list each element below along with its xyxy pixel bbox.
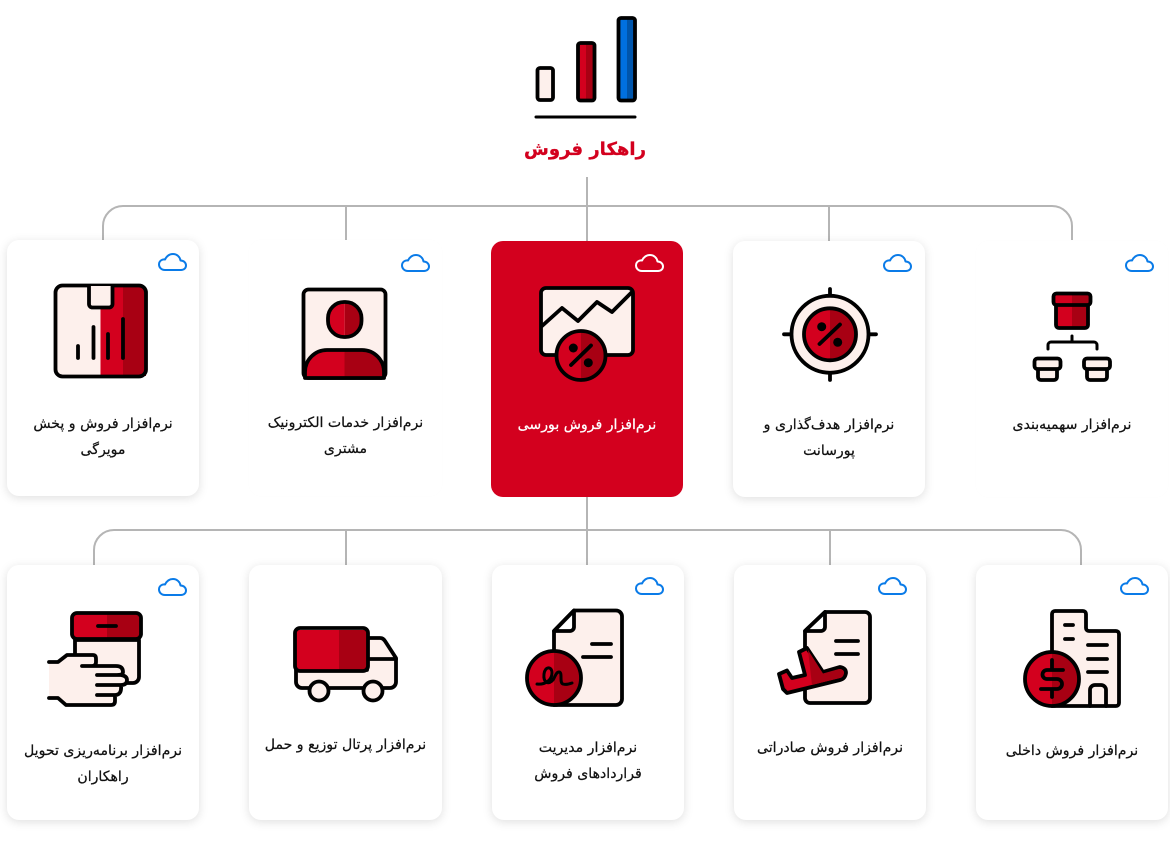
panel: sales contract management bbox=[492, 565, 684, 820]
label: نرم‌افزار خدمات الکترونیک bbox=[268, 415, 423, 431]
label: نرم‌افزار مدیریت bbox=[539, 740, 637, 756]
icon: customer profile bbox=[302, 288, 388, 380]
panel: dealer delivery planning bbox=[7, 565, 199, 820]
label bbox=[268, 415, 423, 457]
label: نرم‌افزار سهمیه‌بندی bbox=[1013, 417, 1131, 433]
panel: customer electronic services bbox=[249, 240, 442, 496]
title: راهکار فروش bbox=[524, 139, 646, 160]
label: نرم‌افزار فروش بورسی bbox=[518, 417, 656, 433]
icon: document with airplane bbox=[777, 610, 872, 705]
label: مشتری bbox=[324, 441, 367, 457]
label: نرم‌افزار فروش صادراتی bbox=[757, 740, 903, 756]
icon: bar chart logo bbox=[534, 16, 637, 118]
label: مویرگی bbox=[80, 442, 126, 458]
label: نرم‌افزار هدف‌گذاری و bbox=[764, 417, 894, 433]
icon: package with bars bbox=[54, 284, 148, 378]
icon: delivery truck bbox=[293, 626, 398, 702]
panel: stock exchange sales bbox=[491, 241, 683, 497]
icon: chart with percent bbox=[539, 286, 635, 382]
label: راهکاران bbox=[77, 769, 129, 785]
label bbox=[534, 740, 642, 782]
icon: cloud bbox=[1120, 577, 1149, 595]
label bbox=[33, 416, 173, 458]
icon: cloud bbox=[635, 577, 664, 595]
icon: cloud bbox=[1125, 254, 1154, 272]
icon: cloud bbox=[158, 578, 187, 596]
label: قراردادهای فروش bbox=[534, 766, 642, 782]
panel: target setting and commission bbox=[733, 241, 925, 497]
icon: cloud bbox=[883, 254, 912, 272]
icon: hand holding box bbox=[47, 611, 143, 707]
label: نرم‌افزار پرتال توزیع و حمل bbox=[265, 737, 426, 753]
icon: cloud bbox=[635, 254, 664, 272]
panel: export sales bbox=[734, 565, 926, 820]
panel: capillary distribution bbox=[7, 240, 199, 496]
label: نرم‌افزار برنامه‌ریزی تحویل bbox=[24, 743, 182, 759]
icon: cloud bbox=[401, 254, 430, 272]
icon: cloud bbox=[878, 577, 907, 595]
label bbox=[24, 743, 182, 785]
label: پورسانت bbox=[803, 443, 855, 459]
label bbox=[762, 416, 894, 459]
label: نرم‌افزار فروش داخلی bbox=[1006, 743, 1138, 759]
icon: signed contract bbox=[525, 608, 624, 707]
panel: domestic sales bbox=[976, 565, 1168, 820]
icon: target with percent bbox=[782, 287, 878, 382]
panel: quota allocation bbox=[976, 241, 1168, 497]
panel: distribution and transport portal bbox=[249, 565, 442, 820]
label: نرم‌افزار فروش و پخش bbox=[33, 416, 173, 432]
icon: building with dollar coin bbox=[1023, 609, 1121, 708]
icon: hierarchy of boxes bbox=[1032, 292, 1112, 382]
icon: cloud bbox=[158, 253, 187, 271]
